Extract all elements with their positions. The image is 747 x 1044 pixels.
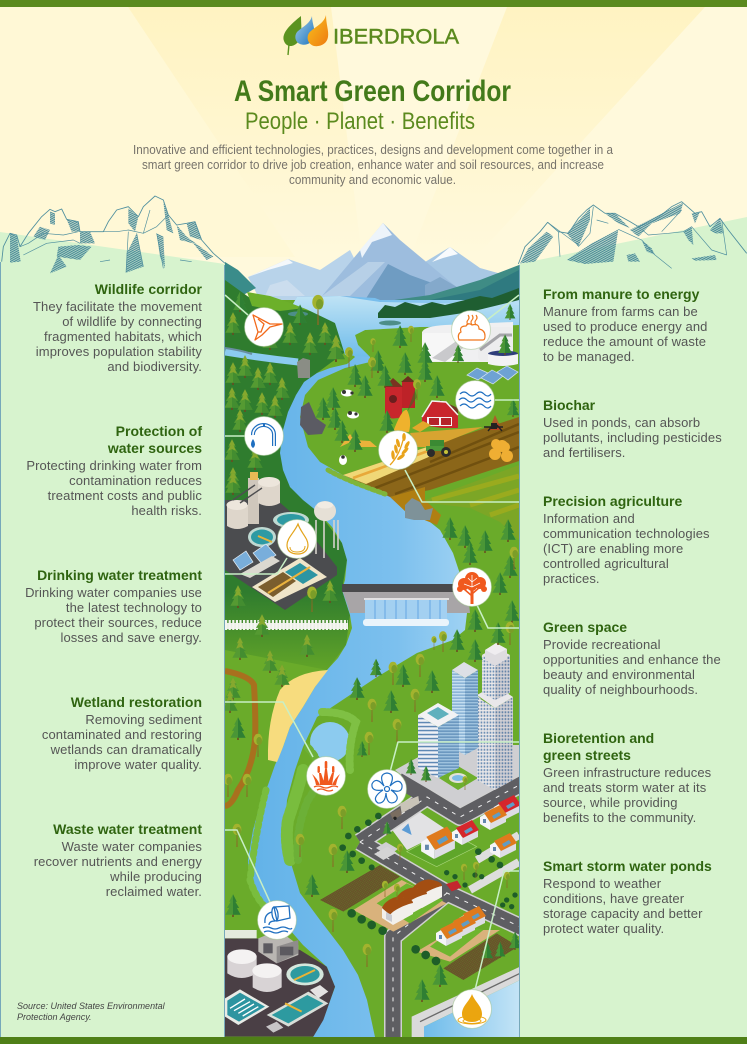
central corridor scene — [222, 223, 525, 1040]
storage tanks — [227, 957, 257, 978]
text: waste water treatment: while producing — [110, 868, 202, 884]
source note: Source: United States Environmental — [17, 1001, 165, 1011]
text: from manure to energy: to be managed. — [543, 348, 635, 364]
text: protection of water sources: contamination reduces — [69, 472, 202, 488]
tractor — [426, 440, 451, 457]
text: bioretention and green streets: Bioretention and — [543, 730, 654, 746]
lake — [293, 296, 519, 357]
text: waste water treatment: reclaimed water. — [106, 884, 202, 898]
icon: biogas cloud — [452, 310, 490, 350]
text: precision agriculture: practices. — [543, 570, 600, 586]
title: A Smart Green Corridor — [234, 75, 511, 108]
text: wildlife corridor: improves population stability — [36, 344, 202, 358]
towers — [418, 643, 513, 790]
text: drinking water treatment — [25, 566, 202, 644]
panel: right column text — [543, 286, 722, 936]
city roads and blocks — [360, 745, 525, 1040]
far treeline — [378, 288, 519, 318]
fields, barns and waste plant (scaled coords) — [225, 796, 520, 1040]
source note: Protection Agency. — [17, 1012, 92, 1022]
round clarifier — [286, 963, 324, 985]
text: smart storm water ponds: storage capacity and better — [543, 906, 703, 920]
water tower — [316, 520, 338, 558]
trail — [225, 671, 255, 806]
text: wetland restoration: contaminated and restoring — [42, 726, 202, 742]
bottom bar — [0, 1037, 747, 1044]
text: drinking water treatment: Drinking water treatment — [37, 566, 202, 582]
text: wildlife corridor: and biodiversity. — [107, 358, 202, 374]
icon: wheat — [378, 430, 418, 470]
rocks — [297, 358, 326, 435]
text: drinking water treatment: protect their sources, reduce — [34, 614, 202, 630]
text: protection of water sources — [26, 422, 202, 518]
text: precision agriculture: controlled agricultural — [543, 556, 669, 570]
river — [248, 296, 519, 1037]
text: wetland restoration — [42, 694, 202, 772]
text: wildlife corridor: fragmented habitats, which — [44, 328, 202, 344]
text: wetland restoration: wetlands can dramatically — [51, 742, 202, 756]
sand yards — [353, 880, 447, 932]
icon: hummingbird — [244, 308, 284, 346]
text: precision agriculture: Precision agriculture — [543, 492, 682, 508]
text: precision agriculture — [543, 492, 710, 586]
forest on left bank — [225, 280, 350, 670]
logo: IBERDROLA — [333, 26, 459, 48]
text: precision agriculture: Information and — [543, 510, 635, 526]
fountain plaza — [439, 766, 478, 790]
subtitle: People · Planet · Benefits — [245, 108, 475, 135]
house groups — [382, 795, 521, 946]
land base — [225, 300, 519, 1037]
text: protection of water sources: Protecting drinking water from — [26, 458, 202, 472]
top bar — [0, 0, 747, 7]
barn — [393, 400, 458, 432]
sketch: mountains left — [2, 196, 225, 273]
panel: left column text — [17, 280, 202, 1022]
logo — [283, 15, 459, 55]
islands — [288, 312, 401, 326]
intro text: smart green corridor to drive job creation, enhance water and soil resources, and increase — [142, 158, 604, 172]
text: bioretention and green streets: benefits to the community. — [543, 810, 696, 824]
text: wildlife corridor: of wildlife by connecting — [62, 314, 202, 328]
icon: reeds — [306, 756, 346, 796]
text: bioretention and green streets: and treats storm water at its — [543, 780, 706, 794]
text: biochar: and fertilisers. — [543, 444, 626, 460]
source note — [17, 1001, 165, 1022]
text: from manure to energy — [543, 286, 708, 364]
tanks — [248, 527, 276, 547]
text: precision agriculture: (ICT) are enabling more — [543, 540, 683, 556]
text: green space: opportunities and enhance the — [543, 652, 721, 666]
sketch: mountains right — [518, 202, 747, 268]
text: from manure to energy: Manure from farms can be — [543, 304, 698, 318]
intro text: community and economic value. — [289, 173, 456, 187]
biogas plant — [422, 322, 518, 366]
text: smart storm water ponds: Respond to weather — [543, 876, 661, 890]
icon: tree — [452, 568, 492, 606]
text: green space: quality of neighbourhoods. — [543, 682, 698, 696]
crop plots — [320, 865, 400, 912]
text: from manure to energy: From manure to energy — [543, 286, 699, 302]
text: bioretention and green streets: Green infrastructure reduces — [543, 764, 711, 780]
connector lines — [225, 295, 519, 990]
silos and tower — [248, 478, 259, 524]
icon: water drop — [278, 520, 316, 558]
text: smart storm water ponds: conditions, have greater — [543, 890, 684, 906]
text: wetland restoration: Wetland restoration — [71, 694, 202, 710]
truck — [390, 796, 419, 820]
waterplant grounds — [225, 472, 338, 610]
solar array — [233, 544, 276, 570]
sky background — [0, 0, 747, 290]
foliage along river bank — [328, 470, 385, 494]
text: smart storm water ponds — [543, 858, 712, 936]
text: bioretention and green streets: source, while providing — [543, 794, 678, 810]
hay on pasture — [340, 434, 377, 447]
text: from manure to energy: reduce the amount of waste — [543, 334, 706, 348]
crosswalks and playground — [374, 847, 397, 860]
text: green space — [543, 618, 721, 696]
text: waste water treatment: Waste water companies — [62, 838, 202, 854]
red car — [446, 881, 462, 891]
intro text: Innovative and efficient technologies, practices, designs and development come together in a — [133, 143, 613, 157]
wetland pond — [250, 712, 356, 915]
text: green space: Green space — [543, 618, 627, 634]
text: waste water treatment — [34, 820, 202, 898]
text: from manure to energy: used to produce energy and — [543, 318, 708, 334]
icon: pipe outfall — [258, 900, 296, 940]
text: protection of water sources: Protection of — [116, 422, 202, 438]
icon: water waves — [456, 380, 494, 420]
dam — [342, 584, 470, 626]
text: bioretention and green streets: green streets — [543, 746, 631, 762]
filter beds — [225, 989, 269, 1025]
icon: oil drop — [452, 990, 492, 1028]
beach — [268, 670, 328, 762]
solar panels — [467, 366, 518, 384]
green slope — [247, 292, 298, 311]
distant mountains — [248, 223, 505, 303]
text: precision agriculture: communication technologies — [543, 526, 710, 540]
text: biochar — [543, 396, 722, 460]
fence — [225, 623, 348, 629]
quay and water — [412, 967, 520, 1040]
text: waste water treatment: recover nutrients and energy — [34, 854, 202, 868]
cows — [339, 390, 359, 465]
text: drinking water treatment: the latest technology to — [66, 600, 202, 614]
text: wildlife corridor: Wildlife corridor — [95, 280, 202, 296]
text: protection of water sources: water sources — [108, 440, 202, 456]
bushes — [339, 813, 518, 965]
text: biochar: Biochar — [543, 396, 595, 412]
text: drinking water treatment: Drinking water companies use — [25, 584, 202, 600]
waste plant ground — [225, 938, 335, 1037]
text: green space: Provide recreational — [543, 636, 661, 652]
text: wildlife corridor: They facilitate the movement — [33, 298, 202, 314]
text: protection of water sources: health risks. — [131, 502, 202, 518]
icon: water tap arch — [244, 416, 284, 456]
drone with hay bales — [484, 415, 513, 462]
tributary — [225, 352, 298, 362]
text: wetland restoration: Removing sediment — [85, 712, 202, 726]
text: wetland restoration: improve water quality. — [74, 756, 202, 772]
icon: flower — [368, 770, 406, 808]
text: biochar: Used in ponds, can absorb — [543, 414, 700, 430]
silos — [384, 376, 417, 418]
teal hills — [225, 262, 519, 300]
office — [258, 930, 298, 963]
text: green space: beauty and environmental — [543, 666, 695, 682]
text: smart storm water ponds: Smart storm water ponds — [543, 858, 712, 874]
text: drinking water treatment: losses and save energy. — [60, 630, 202, 644]
lawns around homes — [407, 830, 477, 867]
text: smart storm water ponds: protect water quality. — [543, 920, 664, 936]
text: waste water treatment: Waste water treatment — [53, 820, 202, 836]
pine trees — [222, 291, 521, 1002]
settling ponds — [252, 558, 327, 602]
text: wildlife corridor — [33, 280, 202, 374]
panel backgrounds with green hills — [0, 217, 747, 1037]
fields — [343, 417, 519, 540]
text: biochar: pollutants, including pesticides — [543, 430, 722, 444]
text: protection of water sources: treatment costs and public — [48, 488, 202, 502]
intro text — [133, 143, 613, 187]
text: bioretention and green streets — [543, 730, 711, 824]
